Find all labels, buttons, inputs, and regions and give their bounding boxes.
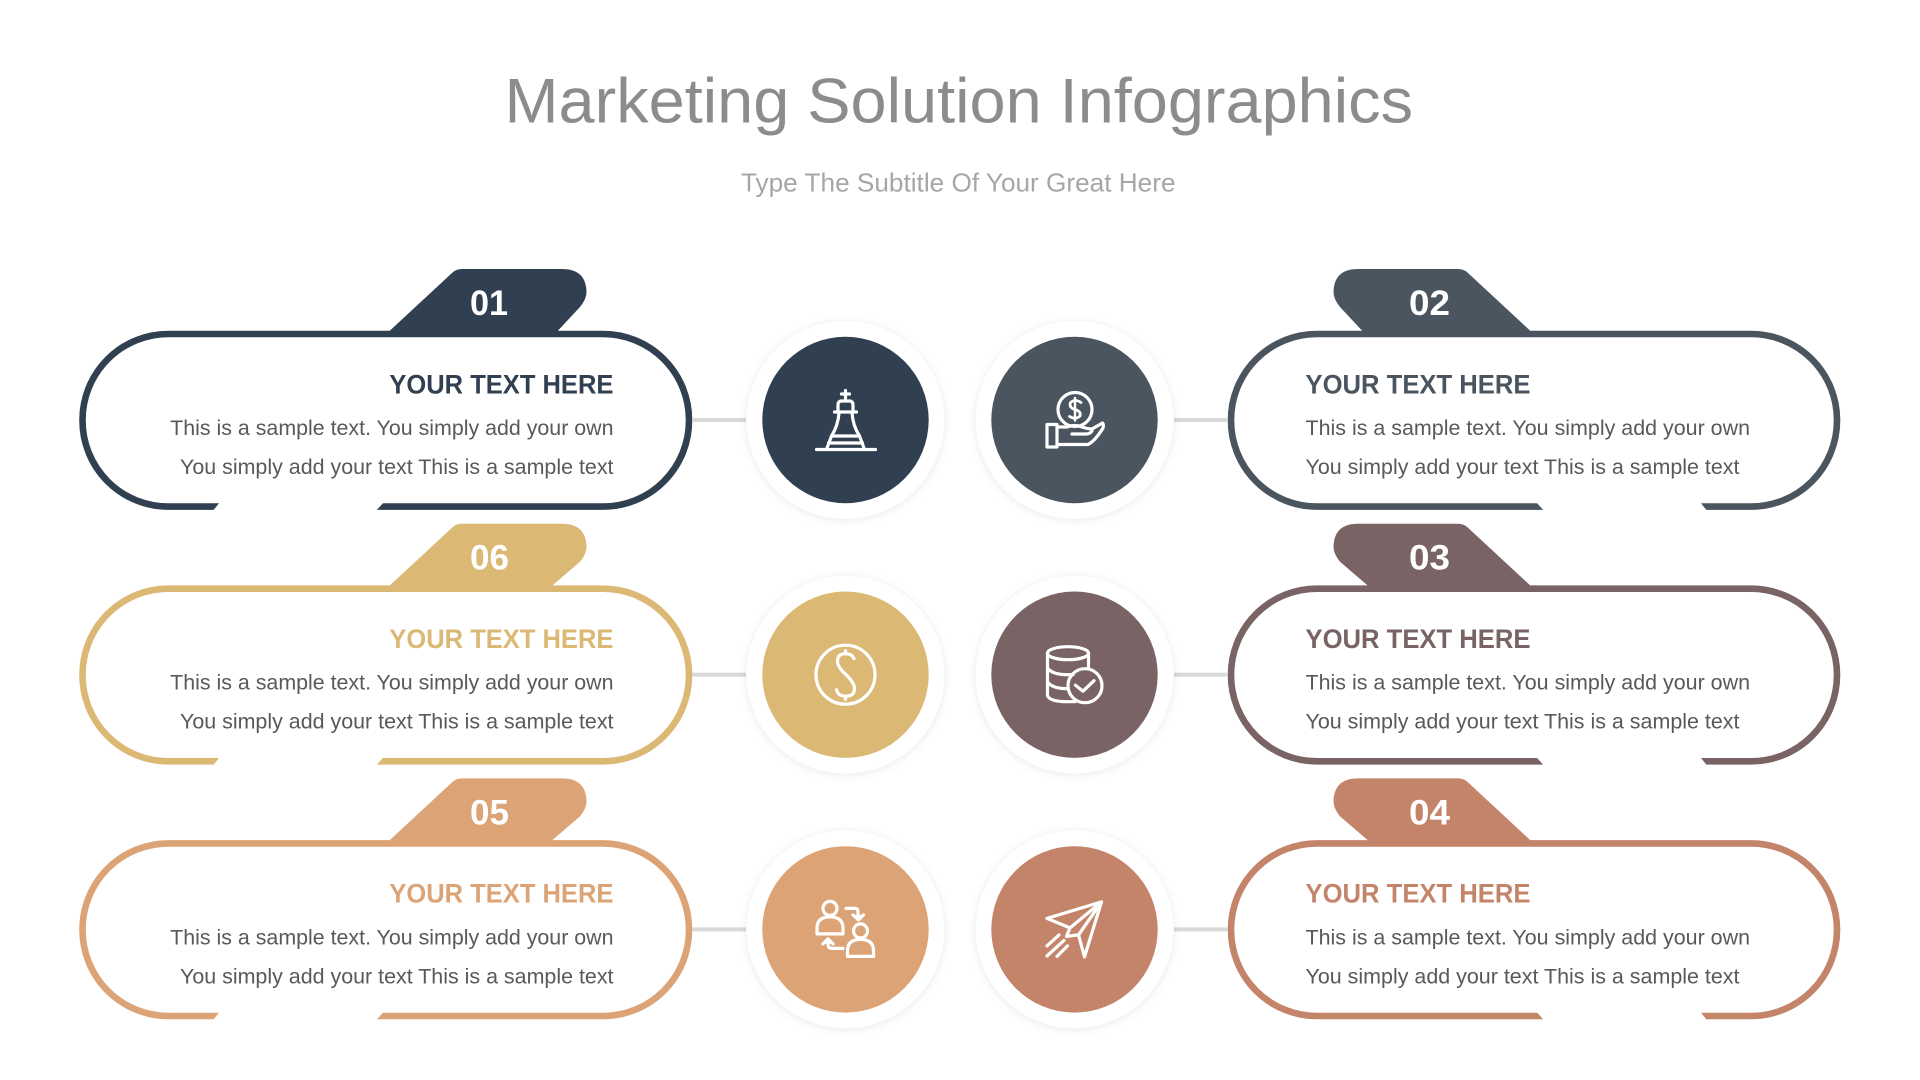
heading: YOUR TEXT HERE	[389, 624, 613, 654]
pill outline	[1231, 843, 1837, 1021]
number tab	[383, 524, 586, 592]
heading: YOUR TEXT HERE	[1306, 370, 1530, 400]
connector	[692, 673, 746, 677]
body text: You simply add your text This is a sample text	[1306, 456, 1740, 479]
number tab: 05	[470, 793, 509, 832]
panel: 05	[82, 778, 944, 1028]
heading: YOUR TEXT HERE	[389, 370, 613, 400]
body text: This is a sample text. You simply add your own	[1306, 672, 1750, 695]
connector	[1174, 418, 1228, 422]
number tab: 02	[1409, 284, 1450, 323]
body text	[1306, 926, 1750, 988]
number tab: 04	[1409, 793, 1451, 832]
number tab	[383, 269, 586, 337]
connector	[692, 418, 746, 422]
body text	[170, 672, 614, 734]
icon: database check	[1048, 647, 1102, 703]
icon: people exchange	[817, 901, 874, 956]
body text	[1306, 672, 1750, 734]
body text: This is a sample text. You simply add your own	[1306, 417, 1750, 440]
icon: chess king	[816, 390, 876, 450]
heading: YOUR TEXT HERE	[1306, 878, 1530, 908]
heading: YOUR TEXT HERE	[1306, 624, 1530, 654]
icon badge	[976, 321, 1174, 519]
body text	[1306, 417, 1750, 479]
title: Marketing Solution Infographics	[504, 66, 1413, 136]
panel: 06	[82, 524, 944, 774]
connector	[1174, 673, 1228, 677]
connector	[692, 927, 746, 931]
body text: You simply add your text This is a sample text	[180, 965, 614, 988]
body text: You simply add your text This is a sample text	[1306, 965, 1740, 988]
icon: dollar coin	[816, 645, 875, 704]
body text: You simply add your text This is a sample text	[180, 456, 614, 479]
body text: This is a sample text. You simply add your own	[1306, 926, 1750, 949]
body text: This is a sample text. You simply add your own	[170, 926, 613, 949]
body text	[170, 417, 614, 479]
panel: 03	[976, 524, 1837, 774]
number tab: 01	[470, 284, 508, 323]
pill outline	[82, 843, 689, 1021]
number tab	[1334, 524, 1537, 592]
body text: You simply add your text This is a sample text	[1306, 711, 1740, 734]
number tab: 06	[470, 539, 509, 578]
pill outline	[1231, 589, 1837, 767]
body text: This is a sample text. You simply add your own	[170, 417, 613, 440]
number tab	[1334, 269, 1537, 337]
icon: paper plane	[1047, 902, 1102, 957]
heading: YOUR TEXT HERE	[389, 878, 613, 908]
number tab	[383, 778, 586, 846]
connector	[1174, 927, 1228, 931]
body text: You simply add your text This is a sample text	[180, 711, 614, 734]
body text: This is a sample text. You simply add your own	[170, 672, 613, 695]
icon badge	[746, 576, 944, 774]
icon badge	[976, 576, 1174, 774]
icon badge	[976, 830, 1174, 1028]
panel: 01	[82, 269, 944, 519]
number tab: 03	[1409, 539, 1450, 578]
icon badge	[746, 830, 944, 1028]
subtitle: Type The Subtitle Of Your Great Here	[741, 168, 1176, 198]
body text	[170, 926, 614, 988]
panel: 02	[976, 269, 1837, 519]
icon: hand holding coin	[1047, 392, 1103, 447]
pill outline	[82, 334, 689, 512]
pill outline	[1231, 334, 1837, 512]
panel: 04	[976, 778, 1837, 1028]
icon badge	[746, 321, 944, 519]
number tab	[1334, 778, 1537, 846]
pill outline	[82, 589, 689, 767]
